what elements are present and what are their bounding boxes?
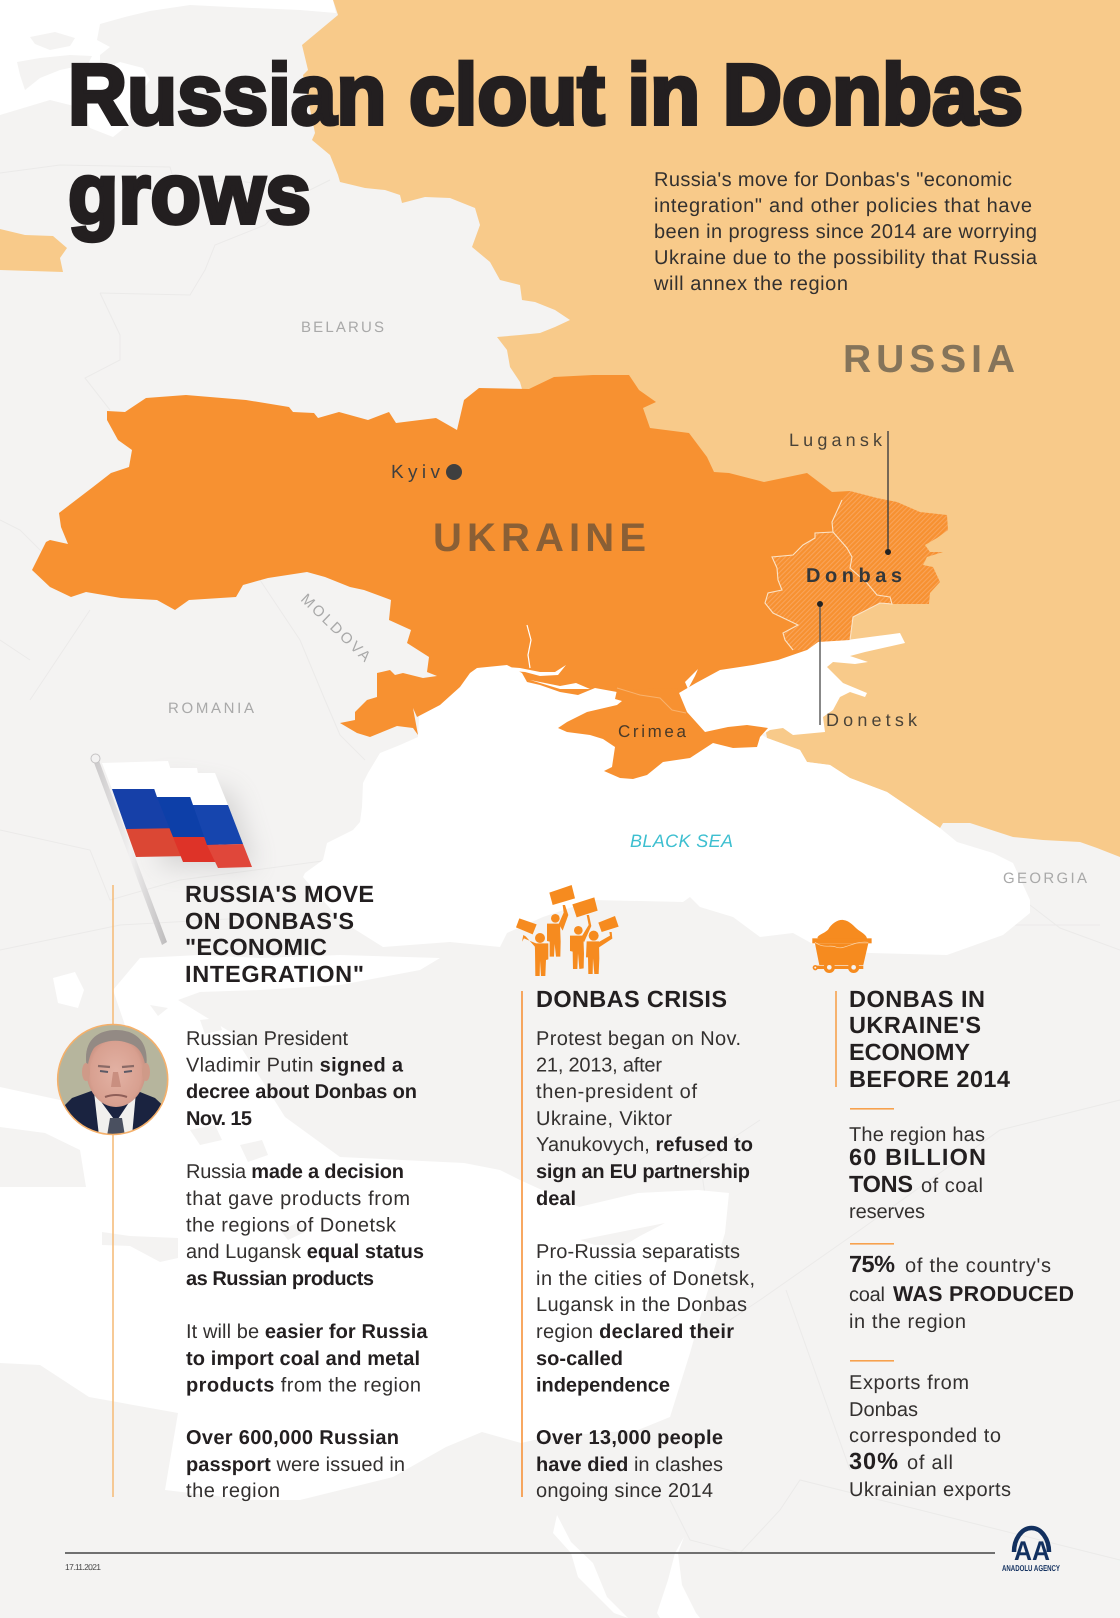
label: Ukraine: UKRAINE (433, 516, 646, 560)
heading: Donbas in Ukraine's economy: UKRAINE'S (849, 1012, 981, 1038)
text block: protest: deal (536, 1188, 576, 1210)
date: 17.11.2021 (65, 1562, 101, 1572)
callout: Lugansk (789, 430, 891, 555)
intro text: Russia's move for Donbas's "economic (654, 169, 1012, 191)
label: Kyiv with dot: Kyiv (391, 462, 440, 483)
stat: coal production: 75% (849, 1251, 895, 1277)
stat: exports: Ukrainian exports (849, 1479, 1011, 1501)
divider: column 1 (112, 885, 114, 1497)
text block: protest: Yanukovych, refused to (536, 1134, 753, 1156)
text block: decision: that gave products from (186, 1188, 410, 1210)
logo: Anadolu Agency: AA (1014, 1536, 1050, 1566)
map: Red Sea gulfs (553, 1515, 700, 1618)
panel: Donbas crisis (536, 986, 755, 1502)
text block: casualties (536, 1427, 723, 1502)
intro text: Ukraine due to the possibility that Russia (654, 247, 1038, 269)
stat: coal reserves: of coal (921, 1175, 983, 1197)
stat: exports: corresponded to (849, 1425, 1001, 1447)
heading: Donbas crisis: DONBAS CRISIS (536, 986, 727, 1012)
icon: Russian flag (91, 754, 255, 945)
label: Russia: RUSSIA (843, 338, 1015, 381)
intro text: been in progress since 2014 are worrying (654, 221, 1037, 243)
title (68, 47, 1023, 242)
icon: coal mine cart (812, 920, 872, 973)
callout: Lugansk: Lugansk (789, 430, 883, 450)
heading: Russia's move: RUSSIA'S MOVE (185, 881, 374, 907)
icon: protesters with signs (516, 885, 619, 976)
stat: exports (849, 1360, 1011, 1501)
title: Russian clout in Donbas (68, 47, 1023, 143)
text block: separatists: Lugansk in the Donbas (536, 1294, 747, 1316)
text block: protest: Ukraine, Viktor (536, 1108, 672, 1130)
text block: passports: the region (186, 1480, 280, 1502)
text block: decision: as Russian products (186, 1268, 374, 1290)
label: Romania: ROMANIA (168, 700, 254, 717)
divider: column 2 (521, 991, 523, 1497)
map: Ukraine (32, 375, 850, 737)
label: Crimea: Crimea (618, 722, 687, 741)
text block: decree: Nov. 15 (186, 1108, 252, 1130)
label: Kyiv with dot (391, 462, 462, 483)
text block: protest (536, 1028, 753, 1210)
callout: Donetsk: Donetsk (826, 710, 918, 730)
stat: coal production: WAS PRODUCED (893, 1282, 1074, 1306)
text block: decree: Vladimir Putin signed a (186, 1055, 404, 1077)
divider: column 3 (835, 991, 837, 1087)
intro text: will annex the region (653, 273, 848, 295)
text block: decision: and Lugansk equal status (186, 1241, 424, 1263)
heading: Russia's move: ON DONBAS'S (185, 908, 354, 934)
callout: Donetsk (817, 601, 918, 730)
heading: Donbas in Ukraine's economy: BEFORE 2014 (849, 1066, 1010, 1092)
text block: passports: passport were issued in (186, 1454, 405, 1476)
text block: decree (186, 1028, 417, 1130)
stat: coal reserves: The region has (849, 1124, 985, 1146)
stat: coal reserves: TONS (849, 1171, 913, 1197)
text block: casualties: ongoing since 2014 (536, 1480, 713, 1502)
panel: Russia's move (185, 881, 428, 1502)
map: Baltic sea (0, 0, 336, 137)
text block: protest: 21, 2013, after (536, 1055, 662, 1077)
portrait: Vladimir Putin (57, 1024, 170, 1136)
map: Donbas region (765, 491, 948, 650)
stat: exports: Exports from (849, 1372, 969, 1394)
text block: decision: Russia made a decision (186, 1161, 404, 1183)
text block: decree: Russian President (186, 1028, 348, 1050)
text block: imports (186, 1321, 428, 1396)
intro text (653, 169, 1038, 295)
heading: Donbas in Ukraine's economy: ECONOMY (849, 1039, 970, 1065)
stat: coal production: coal (849, 1284, 885, 1306)
map: Black Sea and Sea of Azov (303, 633, 1030, 955)
title: grows (68, 146, 311, 242)
text block: casualties: Over 13,000 people (536, 1427, 723, 1449)
map: Baltic islands (17, 32, 92, 90)
stat: exports: 30% (849, 1448, 898, 1474)
text block: separatists: so-called (536, 1348, 623, 1370)
stat: exports: Donbas (849, 1399, 918, 1421)
map: Aegean and Mediterranean sea (0, 955, 729, 1500)
map: Donetsk and Lugansk hatched fill (765, 491, 948, 650)
text block: separatists (536, 1241, 755, 1396)
text block: separatists: independence (536, 1374, 670, 1396)
text block: imports: It will be easier for Russia (186, 1321, 428, 1343)
text block: protest: then-president of (536, 1081, 697, 1103)
stat: coal production: of the country's (905, 1255, 1051, 1277)
text block: passports: Over 600,000 Russian (186, 1427, 399, 1449)
heading: Russia's move: "ECONOMIC (185, 934, 327, 960)
map: Crimea (558, 688, 768, 779)
label: Moldova: MOLDOVA (297, 591, 374, 665)
label: Black Sea: BLACK SEA (630, 831, 733, 851)
stat: coal production: in the region (849, 1311, 966, 1333)
text block: imports: to import coal and metal (186, 1348, 420, 1370)
label: Belarus: BELARUS (301, 319, 384, 336)
text block: passports (186, 1427, 405, 1502)
text block: decision: the regions of Donetsk (186, 1214, 397, 1236)
heading: Donbas in Ukraine's economy (849, 986, 1010, 1092)
stat: exports: of all (907, 1452, 953, 1474)
stat: coal reserves (849, 1108, 986, 1223)
logo: Anadolu Agency (1002, 1528, 1060, 1573)
map: Russia (302, 0, 1120, 857)
label: Georgia: GEORGIA (1003, 870, 1087, 887)
text block: decision (186, 1161, 424, 1290)
text block: protest: sign an EU partnership (536, 1161, 750, 1183)
text block: protest: Protest began on Nov. (536, 1028, 741, 1050)
text block: casualties: have died in clashes (536, 1454, 723, 1476)
map: Dnipro estuary (507, 625, 698, 689)
logo: Anadolu Agency: ANADOLU AGENCY (1002, 1563, 1060, 1573)
panel: Donbas in Ukraine's economy (849, 986, 1074, 1501)
map: Kaliningrad (0, 229, 67, 272)
stat: coal reserves: reserves (849, 1201, 925, 1223)
stat: coal reserves: 60 BILLION (849, 1144, 986, 1170)
heading: Russia's move (185, 881, 374, 987)
heading: Russia's move: INTEGRATION" (185, 961, 364, 987)
intro text: integration" and other policies that have (654, 195, 1032, 217)
text block: imports: products from the region (186, 1374, 421, 1396)
text block: decree: decree about Donbas on (186, 1081, 417, 1103)
label: Donbas: Donbas (806, 565, 902, 587)
text block: separatists: in the cities of Donetsk, (536, 1268, 755, 1290)
heading: Donbas in Ukraine's economy: DONBAS IN (849, 986, 985, 1012)
text block: separatists: region declared their (536, 1321, 734, 1343)
map: oblast boundaries (765, 500, 892, 650)
footer rule (65, 1552, 995, 1554)
stat: coal production (849, 1243, 1074, 1333)
text block: separatists: Pro-Russia separatists (536, 1241, 740, 1263)
map: Mediterranean islands (102, 1005, 665, 1262)
map: Crimea boundary (617, 688, 686, 713)
